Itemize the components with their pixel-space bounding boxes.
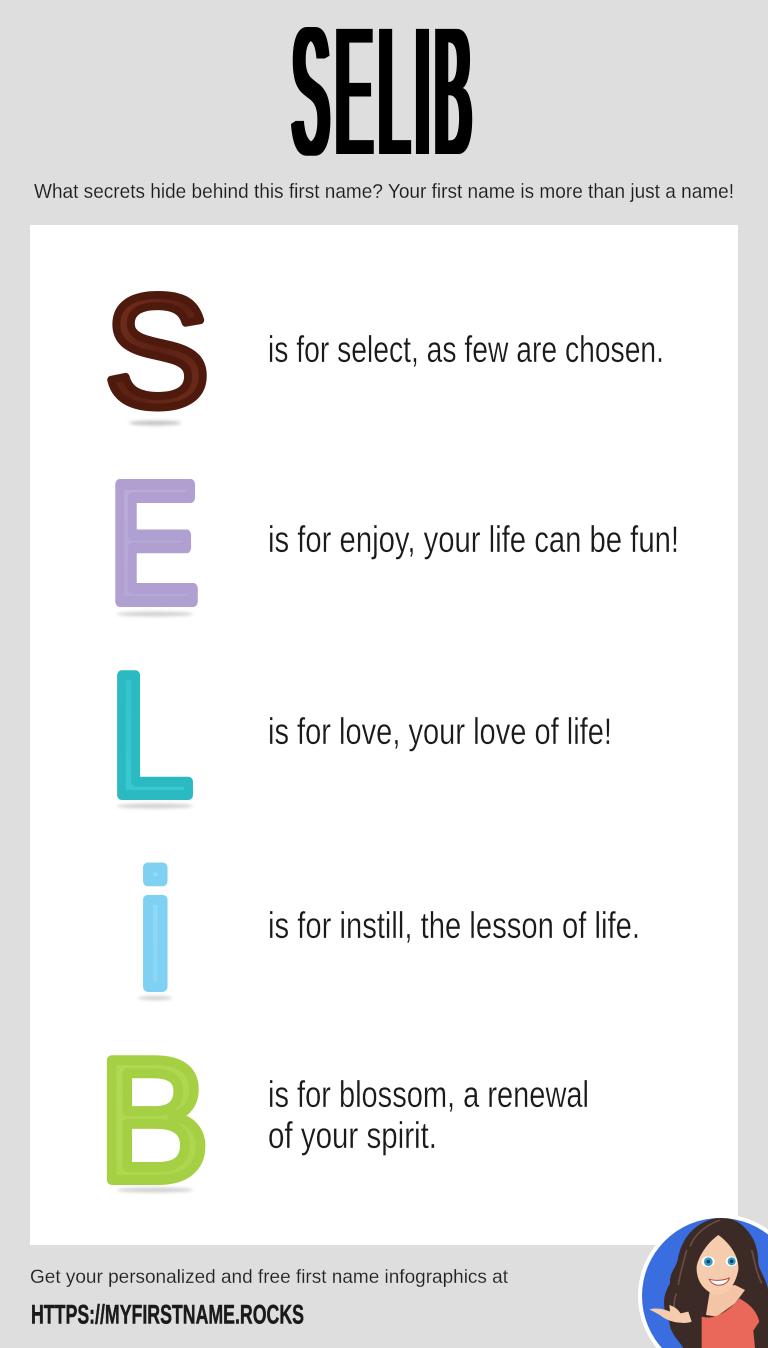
face <box>697 1235 738 1295</box>
hair <box>664 1217 768 1348</box>
row: letter L <box>109 637 612 832</box>
text: B lines: is for blossom, a renewal <box>268 1073 589 1115</box>
icon: letter S: S <box>104 262 210 440</box>
row: letter E <box>108 448 679 638</box>
row: letter S <box>104 262 664 440</box>
shirt <box>702 1298 759 1348</box>
subtitle: What secrets hide behind this first name? Your first name is more than just a name! <box>34 181 734 203</box>
avatar <box>638 1214 768 1348</box>
mouth <box>709 1278 729 1285</box>
hand <box>649 1305 692 1323</box>
icon: letter E: E <box>108 448 199 638</box>
neck <box>706 1285 745 1317</box>
row: letter i <box>137 838 640 1022</box>
icon: letter L: L <box>109 637 194 832</box>
row: letter B <box>98 1024 589 1218</box>
icon: letter B: B <box>98 1024 209 1218</box>
text: B lines: of your spirit. <box>268 1114 437 1156</box>
hair highlights <box>674 1220 762 1317</box>
left eye <box>701 1256 715 1267</box>
text: i line: is for instill, the lesson of life. <box>268 904 640 946</box>
text: B lines <box>268 1073 589 1156</box>
footer text: Get your personalized and free first name infographics at <box>30 1266 509 1288</box>
panel: letters <box>30 225 738 1245</box>
text: L line: is for love, your love of life! <box>268 710 612 752</box>
right eye <box>726 1256 737 1266</box>
icon: letter i: i <box>137 838 174 1022</box>
footer url: HTTPS://MYFIRSTNAME.ROCKS <box>31 1300 304 1330</box>
